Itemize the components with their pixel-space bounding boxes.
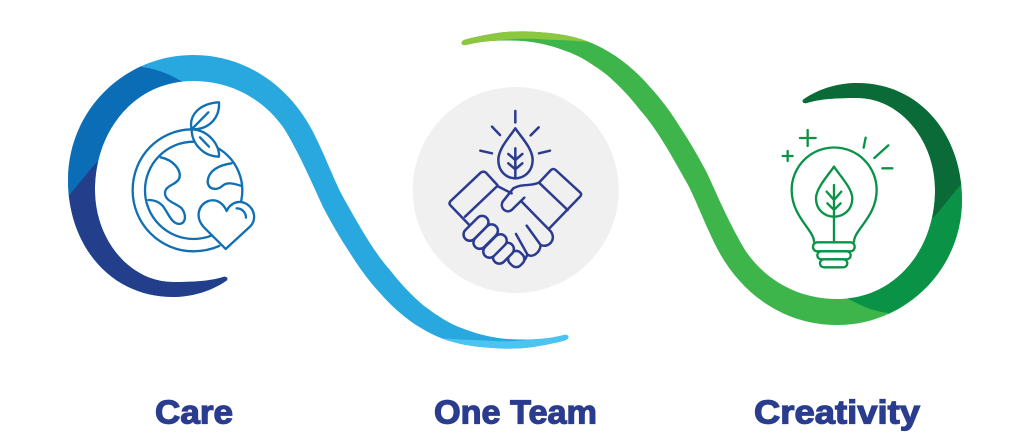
clasped hands (449, 169, 581, 270)
label: One Team: One Team (434, 394, 597, 430)
green ribbon (462, 31, 962, 325)
grey circle (413, 87, 619, 293)
blue ribbon (68, 55, 568, 349)
icon: light bulb with leaf (783, 130, 892, 267)
icon: globe with leaf and heart (133, 102, 254, 251)
label: Care: Care (155, 394, 233, 430)
icon: handshake with drop (449, 111, 581, 270)
drop and rays (480, 111, 550, 178)
label: Creativity: Creativity (754, 394, 921, 430)
